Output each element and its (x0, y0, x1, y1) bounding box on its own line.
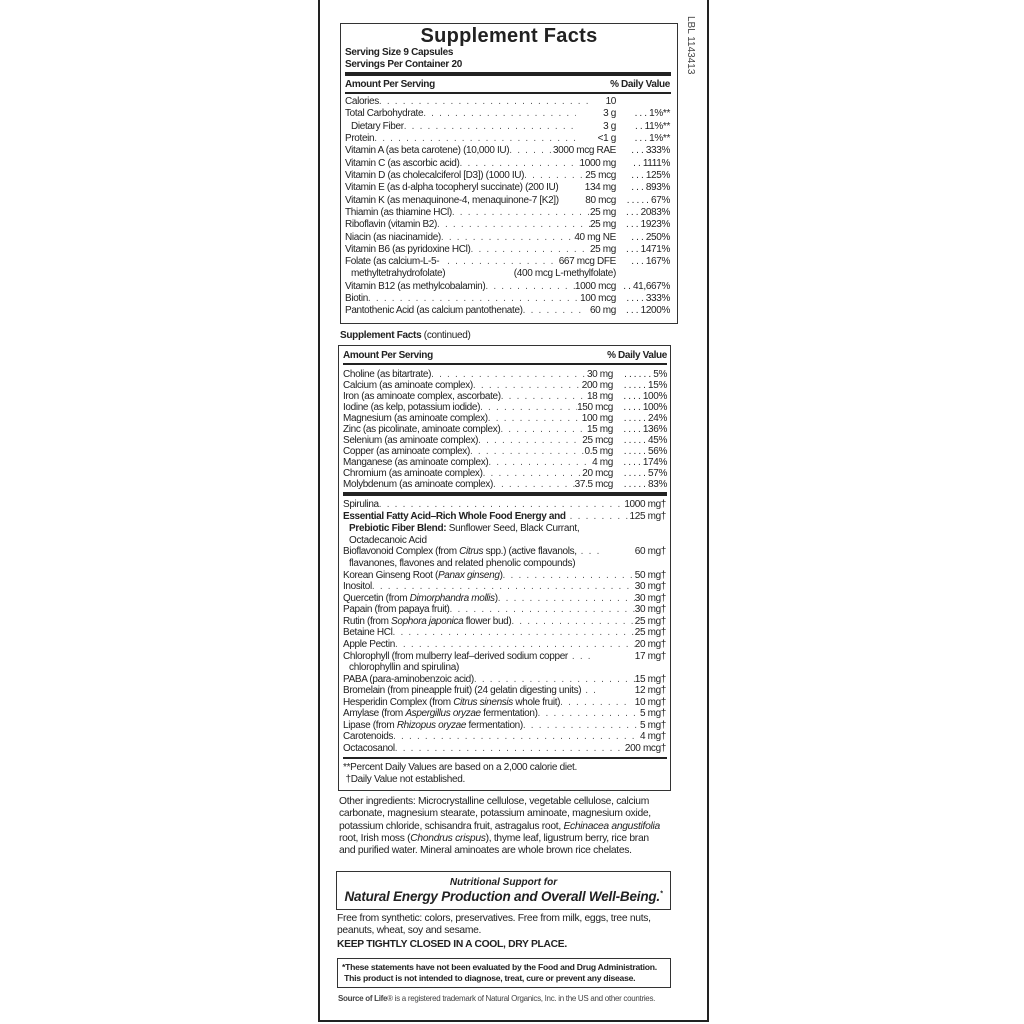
text: . . . . 174% (623, 457, 667, 468)
panel: supplement facts continued (338, 345, 671, 791)
other ingredients text: and purified water. Mineral aminoates are whole brown rice chelates. (339, 845, 632, 856)
text: Chromium (as aminoate complex) (343, 468, 483, 479)
text: 25 mg (590, 219, 616, 230)
text: 50 mg† (635, 570, 666, 581)
text: Total Carbohydrate (345, 108, 423, 119)
text: 3 g (603, 121, 616, 132)
text: . . . 125% (631, 170, 670, 181)
storage text: KEEP TIGHTLY CLOSED IN A COOL, DRY PLACE. (337, 939, 567, 950)
text: . . . . . 67% (627, 195, 670, 206)
text: . . . 2083% (626, 207, 670, 218)
text: 5 mg† (640, 720, 666, 731)
callout: nutritional support (336, 871, 671, 910)
other ingredients text: root, Irish moss (Chondrus crispus), thyme leaf, ligustrum berry, rice bran (339, 833, 649, 844)
text: 30 mg† (635, 581, 666, 592)
free from text: Free from synthetic: colors, preservatives. Free from milk, eggs, tree nuts, (337, 913, 651, 924)
panel: supplement facts main (340, 23, 678, 324)
text: Chlorophyll (from mulberry leaf–derived sodium copper (343, 651, 568, 662)
text: . . . 1%** (635, 133, 670, 144)
text: 125 mg† (630, 511, 666, 522)
text: 1000 mcg (575, 281, 616, 292)
continued heading: Supplement Facts (continued) (340, 330, 471, 341)
footnotes: †Daily Value not established. (345, 774, 465, 785)
header row 2: Amount Per Serving (343, 350, 433, 361)
other ingredients text: carbonate, magnesium stearate, potassium aminoate, magnesium oxide, (339, 808, 651, 819)
text: flavanones, flavones and related phenolic compounds) (349, 558, 575, 569)
text: Octadecanoic Acid (349, 535, 427, 546)
text: 10 (606, 96, 616, 107)
text: Magnesium (as aminoate complex) (343, 413, 488, 424)
text: . . . . . 15% (624, 380, 667, 391)
text: Bromelain (from pineapple fruit) (24 gelatin digesting units) (343, 685, 581, 696)
text: . . . . 100% (623, 391, 667, 402)
text: 80 mcg (585, 195, 616, 206)
text: . . . . . . 5% (624, 369, 667, 380)
text: Lipase (from Rhizopus oryzae fermentation) (343, 720, 523, 731)
text: . . . . . 56% (624, 446, 667, 457)
text: 20 mg† (635, 639, 666, 650)
footnotes (343, 762, 577, 785)
text: 60 mg† (635, 546, 666, 557)
text: Calcium (as aminoate complex) (343, 380, 473, 391)
text: (400 mcg L-methylfolate) (514, 268, 616, 279)
text: 15 mg† (635, 674, 666, 685)
callout: nutritional support: Natural Energy Production and Overall Well-Being.* (344, 889, 663, 904)
text: 1000 mg (580, 158, 616, 169)
text: 30 mg† (635, 604, 666, 615)
text: 18 mg (587, 391, 613, 402)
text: 200 mg (582, 380, 613, 391)
text: Vitamin A (as beta carotene) (10,000 IU) (345, 145, 509, 156)
free from text: peanuts, wheat, soy and sesame. (337, 925, 481, 936)
vitamins list (345, 96, 670, 316)
header row: % Daily Value (610, 79, 670, 90)
other ingredients text: Other ingredients: Microcrystalline cellulose, vegetable cellulose, calcium (339, 796, 649, 807)
text: <1 g (598, 133, 616, 144)
header row: Amount Per Serving (345, 79, 435, 90)
header row 2 (343, 350, 667, 361)
text: Selenium (as aminoate complex) (343, 435, 478, 446)
text: . . . . . 24% (624, 413, 667, 424)
text: Vitamin B6 (as pyridoxine HCl) (345, 244, 470, 255)
text: . . 41,667% (623, 281, 670, 292)
text: Hesperidin Complex (from Citrus sinensis whole fruit) (343, 697, 560, 708)
text: . . . 1471% (626, 244, 670, 255)
text: . . (585, 685, 597, 696)
text: . . . (572, 651, 592, 662)
text: Octacosanol (343, 743, 395, 754)
footnotes: **Percent Daily Values are based on a 2,000 calorie diet. (343, 762, 577, 773)
text: 25 mcg (582, 435, 613, 446)
text: . . . . . 45% (624, 435, 667, 446)
text: Apple Pectin (343, 639, 395, 650)
text: . . . 1923% (626, 219, 670, 230)
text: 20 mcg (582, 468, 613, 479)
text: Papain (from papaya fruit) (343, 604, 450, 615)
text: chlorophyllin and spirulina) (349, 662, 459, 673)
text: Manganese (as aminoate complex) (343, 457, 488, 468)
text: 30 mg† (635, 593, 666, 604)
text: Molybdenum (as aminoate complex) (343, 479, 493, 490)
text: . . . 893% (631, 182, 670, 193)
text: Rutin (from Sophora japonica flower bud) (343, 616, 511, 627)
other ingredients text: potassium chloride, schisandra fruit, astragalus root, Echinacea angustifolia (339, 821, 660, 832)
text: . . . . . . . . . (560, 697, 628, 708)
text: 25 mg (590, 207, 616, 218)
text: 25 mcg (585, 170, 616, 181)
text: Dietary Fiber (351, 121, 404, 132)
text: 200 mcg† (625, 743, 666, 754)
text: Spirulina (343, 499, 379, 510)
text: . . . . 100% (623, 402, 667, 413)
text: methyltetrahydrofolate) (351, 268, 445, 279)
text: Folate (as calcium-L-5- (345, 256, 439, 267)
text: PABA (para-aminobenzoic acid) (343, 674, 474, 685)
disclaimer box: *These statements have not been evaluated by the Food and Drug Administration. (342, 962, 657, 972)
text: 12 mg† (635, 685, 666, 696)
text: Iodine (as kelp, potassium iodide) (343, 402, 480, 413)
text: 4 mg (592, 457, 613, 468)
text: Amylase (from Aspergillus oryzae fermentation) (343, 708, 538, 719)
text: Quercetin (from Dimorphandra mollis) (343, 593, 498, 604)
text: . . . . . 83% (624, 479, 667, 490)
text: Vitamin B12 (as methylcobalamin) (345, 281, 485, 292)
text: Inositol (343, 581, 372, 592)
text: 15 mg (587, 424, 613, 435)
text: 37.5 mcg (575, 479, 613, 490)
text: 10 mg† (635, 697, 666, 708)
text: . . . 167% (631, 256, 670, 267)
disclaimer box: This product is not intended to diagnose, treat, cure or prevent any disease. (344, 973, 635, 983)
text: . . 1111% (633, 158, 670, 169)
text: Prebiotic Fiber Blend: Sunflower Seed, Black Currant, (349, 523, 579, 534)
header row 2: % Daily Value (607, 350, 667, 361)
text: Iron (as aminoate complex, ascorbate) (343, 391, 501, 402)
text: 3000 mcg RAE (553, 145, 616, 156)
text: 0.5 mg (585, 446, 613, 457)
callout: nutritional support: Nutritional Support for (450, 877, 557, 888)
text: Vitamin D (as cholecalciferol [D3]) (1000 IU) (345, 170, 524, 181)
text: Bioflavonoid Complex (from Citrus spp.) (active flavanols, (343, 546, 577, 557)
outer label frame (318, 0, 709, 1022)
text: Riboflavin (vitamin B2) (345, 219, 437, 230)
text: . . . . 136% (623, 424, 667, 435)
text: 4 mg† (640, 731, 666, 742)
text: 17 mg† (635, 651, 666, 662)
text: 1000 mg† (624, 499, 666, 510)
text: . . . 1200% (626, 305, 670, 316)
disclaimer box (337, 958, 671, 988)
text: Niacin (as niacinamide) (345, 232, 441, 243)
text: Essential Fatty Acid–Rich Whole Food Energy and (343, 511, 566, 522)
text: 150 mcg (577, 402, 613, 413)
text: Betaine HCl (343, 627, 393, 638)
text: . . . . . . . . (524, 170, 584, 181)
text: Vitamin C (as ascorbic acid) (345, 158, 460, 169)
text: Pantothenic Acid (as calcium pantothenate) (345, 305, 523, 316)
header row (345, 79, 670, 90)
text: 100 mcg (580, 293, 616, 304)
text: 100 mg (582, 413, 613, 424)
text: Biotin (345, 293, 368, 304)
blend list (343, 499, 666, 754)
text: 667 mcg DFE (559, 256, 616, 267)
title: Supplement Facts (420, 25, 598, 47)
text: Zinc (as picolinate, aminoate complex) (343, 424, 500, 435)
text: . . 11%** (635, 121, 670, 132)
text: 40 mg NE (574, 232, 616, 243)
text: . . . (581, 546, 601, 557)
text: Carotenoids (343, 731, 393, 742)
text: . . . 333% (631, 145, 670, 156)
text: Copper (as aminoate complex) (343, 446, 470, 457)
trademark text: Source of Life® is a registered trademark of Natural Organics, Inc. in the US and other countries. (338, 994, 655, 1003)
free from text (337, 913, 651, 936)
serving info: Servings Per Container 20 (345, 59, 462, 70)
minerals list (343, 369, 668, 490)
text: 25 mg† (635, 627, 666, 638)
text: 30 mg (587, 369, 613, 380)
text: Vitamin E (as d-alpha tocopheryl succinate) (200 IU) (345, 182, 558, 193)
text: Vitamin K (as menaquinone-4, menaquinone-7 [K2]) (345, 195, 559, 206)
text: . . . . . 57% (624, 468, 667, 479)
text: . . . . . . . . (570, 511, 629, 522)
serving info: Serving Size 9 Capsules (345, 47, 453, 58)
text: 5 mg† (640, 708, 666, 719)
text: . . . . . . . . (523, 305, 582, 316)
text: 134 mg (585, 182, 616, 193)
text: 25 mg† (635, 616, 666, 627)
text: Korean Ginseng Root (Panax ginseng) (343, 570, 503, 581)
text: . . . 1%** (635, 108, 670, 119)
text: 25 mg (590, 244, 616, 255)
text: 60 mg (590, 305, 616, 316)
text: 3 g (603, 108, 616, 119)
text: . . . 250% (631, 232, 670, 243)
text: Choline (as bitartrate) (343, 369, 431, 380)
label code vertical: LBL 1143413 (685, 16, 696, 74)
text: Calories (345, 96, 379, 107)
other ingredients text (339, 796, 660, 856)
text: Thiamin (as thiamine HCl) (345, 207, 452, 218)
text: . . . . 333% (626, 293, 670, 304)
serving info (345, 47, 462, 70)
text: Protein (345, 133, 374, 144)
